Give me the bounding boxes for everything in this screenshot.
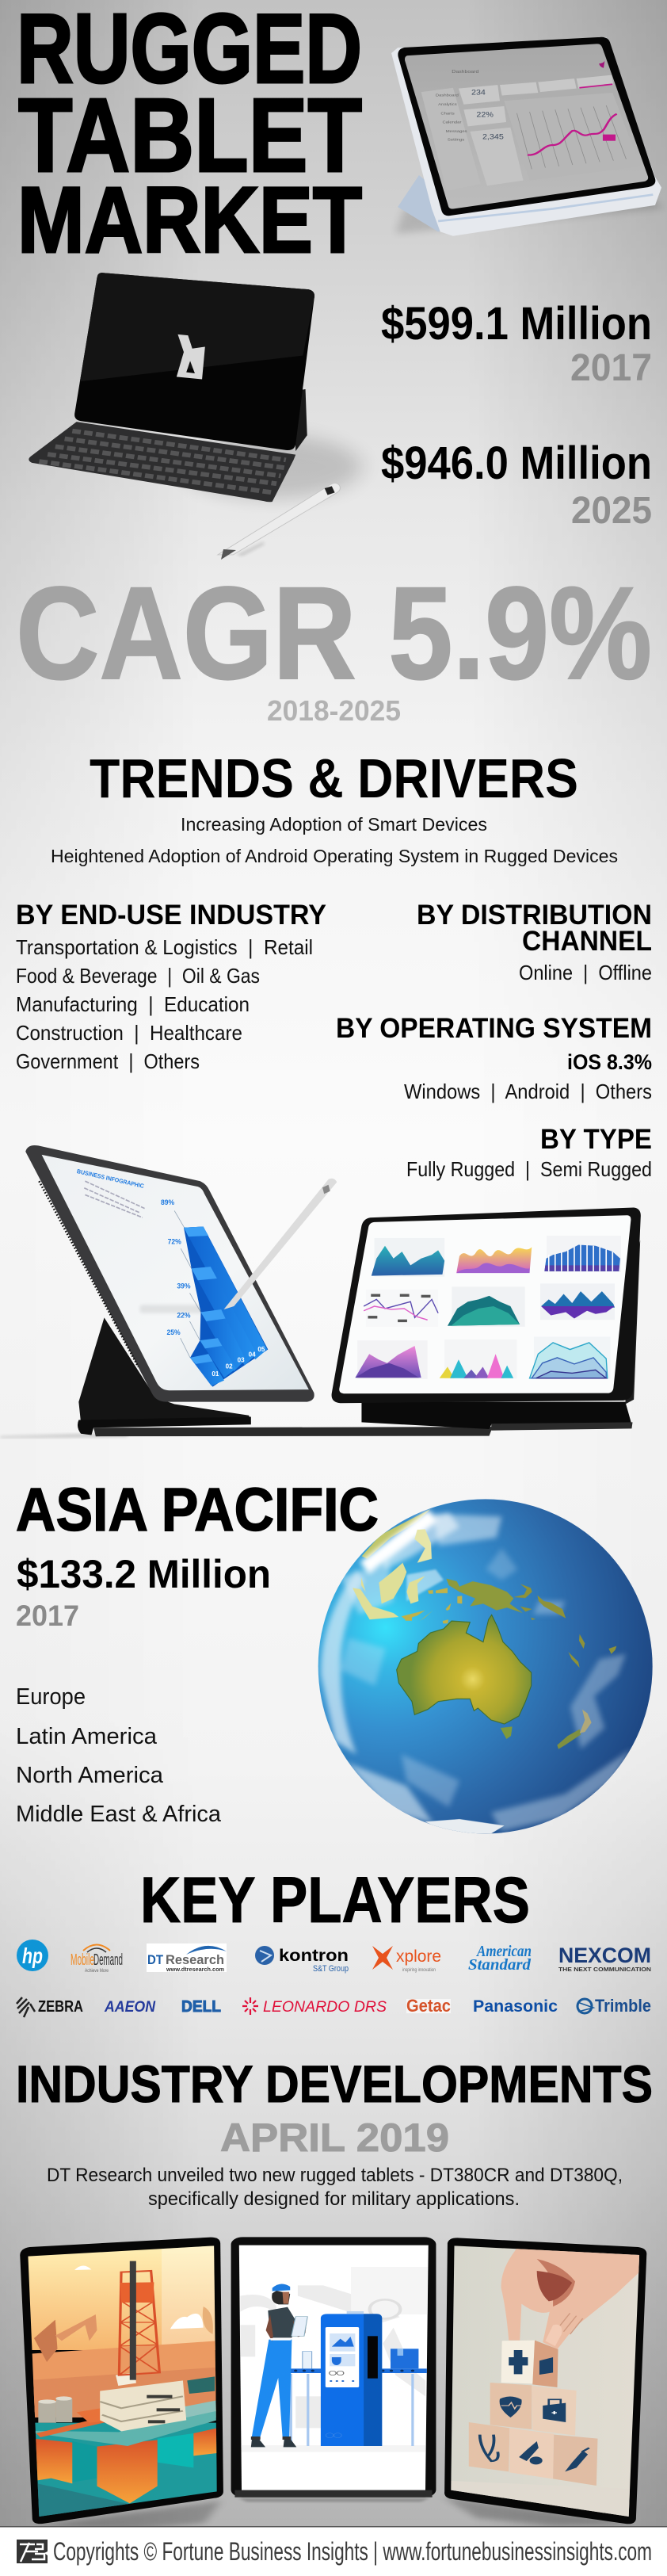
logo: DT Research	[147, 1943, 227, 1973]
heading: trends and drivers: Increasing Adoption of Smart Devices	[181, 814, 487, 835]
image: tablet with 3D bar chart and stylus: 01	[212, 1370, 219, 1378]
chart: purple line	[364, 1290, 438, 1327]
logo: Xplore	[372, 1946, 441, 1973]
heading: Asia Pacific: $133.2 Million	[17, 1552, 271, 1596]
text: Demand	[93, 1951, 123, 1969]
stat: 2025 market value	[381, 438, 652, 532]
logo: Leonardo DRS: LEONARDO DRS	[263, 1999, 387, 2016]
logo: DT Research: www.dtresearch.com	[166, 1967, 224, 1973]
text block: development description	[47, 2165, 623, 2210]
image: tablet with 3D bar chart and stylus	[0, 1145, 493, 1438]
logo: NEXCOM: THE NEXT COMMUNICATION	[558, 1966, 651, 1973]
logo: Xplore: inspiring innovation	[402, 1968, 436, 1973]
logo: AAEON: AAEON	[104, 1999, 156, 2016]
stat: 2017 market value	[381, 298, 652, 389]
logo: MobileDemand: Achieve More	[85, 1969, 109, 1974]
chart: purple mirrored	[540, 1283, 615, 1320]
image: tablet with dashboard and folding case: Dashboard	[452, 69, 479, 75]
chart: yellow pink waves	[456, 1247, 532, 1273]
footer band	[0, 2526, 667, 2576]
chart: teal mountains	[448, 1286, 525, 1327]
logo: HP: hp	[22, 1943, 43, 1968]
image: tablet with dashboard and folding case	[391, 37, 664, 236]
logo: MobileDemand: Mobile	[71, 1951, 94, 1969]
tablet: oil rig illustration	[20, 2238, 223, 2530]
tablet: factory worker illustration	[231, 2237, 436, 2502]
panel: by end-use industry: Government | Others	[16, 1049, 200, 1073]
image: black tablet on keyboard with stylus	[29, 273, 361, 556]
chart: pink area	[355, 1340, 428, 1379]
logo: Zebra	[17, 1997, 83, 2017]
image: tablet with dashboard and folding case: Messages	[446, 129, 467, 134]
list: other regions: Latin America	[16, 1724, 158, 1749]
chart: teal area	[372, 1238, 444, 1277]
title: MARKET	[17, 168, 362, 273]
image: tablet with dashboard and folding case: 234	[471, 89, 486, 97]
image: tablet with 3D bar chart and stylus: BUSINESS INFOGRAPHIC	[76, 1168, 145, 1190]
panel: by operating system: iOS 8.3%	[567, 1050, 652, 1074]
image: tablet with 3D bar chart and stylus: 04	[249, 1350, 256, 1359]
panel: by end-use industry: BY END-USE INDUSTRY	[16, 900, 326, 931]
heading: trends and drivers	[51, 747, 618, 866]
image: tablet with dashboard and folding case: Calendar	[442, 120, 462, 124]
logo: American Standard: Standard	[468, 1956, 532, 1974]
panel: by distribution channel: CHANNEL	[522, 926, 652, 957]
panel: by type	[406, 1124, 652, 1181]
CAGR headline: 2018-2025	[267, 694, 401, 727]
chart: blue bars	[544, 1236, 621, 1272]
logo: Getac: Getac	[406, 1996, 451, 2016]
panel: by end-use industry	[16, 900, 326, 1073]
logo: DT Research: Research	[166, 1952, 224, 1967]
logo: Kontron: kontron	[279, 1947, 349, 1965]
chart: blue outline waves	[530, 1336, 611, 1378]
image: tablet with nine charts	[332, 1207, 641, 1431]
logo: Xplore: xplore	[396, 1947, 441, 1966]
logo: Kontron	[255, 1946, 349, 1974]
logo: NEXCOM: NEXCOM	[558, 1943, 651, 1967]
image: tablet with 3D bar chart and stylus: 25%	[167, 1328, 181, 1336]
image: tablet with 3D bar chart and stylus: 39%	[177, 1282, 191, 1290]
icon: globe centred on Australia	[318, 1499, 653, 1833]
list: other regions: Middle East & Africa	[16, 1802, 222, 1827]
logo: Dell: DELL	[181, 1998, 221, 2016]
image: tablet with dashboard and folding case: 2,345	[482, 133, 504, 141]
text block: development description: DT Research unveiled two new rugged tablets - DT380CR and DT380Q,	[47, 2165, 623, 2186]
chart: triangles	[440, 1340, 516, 1378]
panel: by distribution channel: BY DISTRIBUTION	[417, 900, 652, 931]
panel: by type: BY TYPE	[540, 1124, 652, 1155]
panel: by operating system: BY OPERATING SYSTEM	[336, 1013, 652, 1044]
image: tablet with 3D bar chart and stylus: 22%	[177, 1311, 191, 1319]
panel: by end-use industry: Construction | Healthcare	[16, 1021, 242, 1045]
list: other regions: Europe	[16, 1684, 86, 1710]
panel: by end-use industry: Transportation & Logistics | Retail	[16, 935, 313, 959]
list: other regions: North America	[16, 1763, 164, 1788]
image: tablet with 3D bar chart and stylus: 72%	[168, 1237, 181, 1245]
logo: Trimble: Trimble	[595, 1996, 651, 2016]
panel: by operating system	[336, 1013, 652, 1103]
image: tablet with dashboard and folding case: Charts	[440, 112, 455, 116]
image: tablet with 3D bar chart and stylus: 05	[257, 1345, 265, 1353]
image: tablet with 3D bar chart and stylus: 02	[226, 1362, 233, 1370]
heading: Asia Pacific	[16, 1476, 379, 1632]
stylus tip	[221, 549, 236, 560]
logo: Kontron: S&T Group	[313, 1964, 349, 1974]
logo: American Standard: American	[475, 1943, 532, 1960]
tablet: healthcare blocks illustration	[442, 2238, 646, 2526]
heading: industry developments	[16, 2054, 653, 2160]
image: tablet with dashboard and folding case: Settings	[448, 138, 465, 142]
stat: 2017 market value: 2017	[570, 347, 652, 389]
logo: HP	[17, 1940, 48, 1971]
image: tablet with dashboard and folding case: Dashboard	[436, 94, 459, 97]
heading: Asia Pacific: 2017	[16, 1599, 79, 1632]
title: TABLET	[18, 77, 362, 193]
heading: industry developments: APRIL 2019	[220, 2115, 449, 2160]
panel: by distribution channel	[417, 900, 652, 984]
image: tablet with dashboard and folding case: Analytics	[438, 102, 457, 107]
logo: Panasonic: Panasonic	[473, 1997, 558, 2016]
image: tablet with 3D bar chart and stylus: 89%	[161, 1198, 174, 1206]
image: tablet with dashboard and folding case: 22%	[476, 111, 494, 119]
heading: trends and drivers: Heightened Adoption of Android Operating System in Rugged Devices	[51, 846, 618, 866]
logo: DT Research: DT	[147, 1952, 164, 1967]
title	[17, 0, 362, 273]
text block: development description: specifically designed for military applications.	[148, 2188, 520, 2210]
logo: Fortune Business Insights	[17, 2540, 48, 2563]
logo: Zebra: ZEBRA	[38, 1998, 83, 2016]
heading: Asia Pacific: ASIA PACIFIC	[16, 1476, 379, 1544]
stat: 2025 market value: 2025	[571, 490, 652, 532]
heading: trends and drivers: TRENDS & DRIVERS	[90, 747, 578, 809]
logo: MobileDemand	[71, 1945, 123, 1974]
panel: by end-use industry: Manufacturing | Education	[16, 992, 250, 1016]
panel: by end-use industry: Food & Beverage | Oil & Gas	[16, 964, 260, 988]
image: tablet with 3D bar chart and stylus: 03	[238, 1355, 245, 1364]
heading: key players: KEY PLAYERS	[140, 1864, 530, 1936]
logo: American Standard	[468, 1943, 532, 1974]
panel: by distribution channel: Online | Offline	[519, 961, 652, 984]
list: other regions	[16, 1684, 222, 1827]
